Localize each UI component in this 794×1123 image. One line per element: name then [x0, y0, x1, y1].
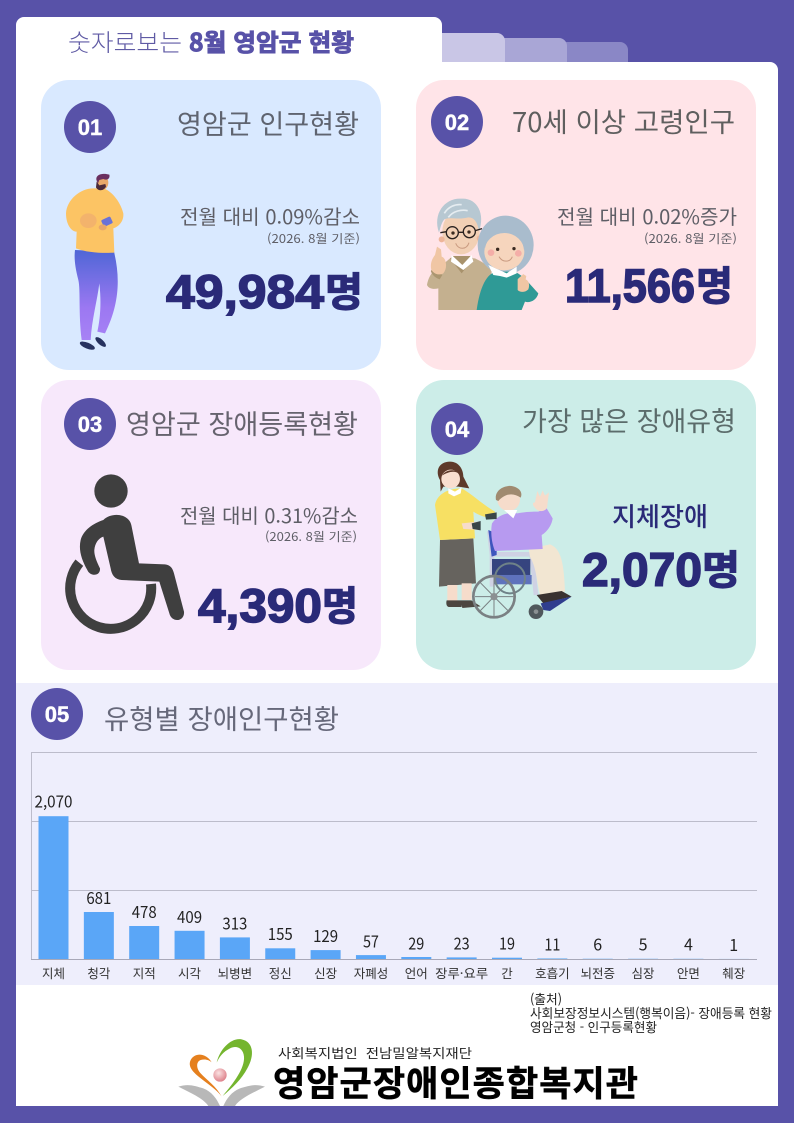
badge 01: 01 [78, 115, 102, 140]
date note: (2026. 8월 기준) [644, 230, 737, 247]
bar chart [31, 752, 757, 982]
figure: 49,984 [166, 265, 324, 318]
bar: 뇌전증 [580, 932, 615, 982]
bar: 간: 간 [501, 963, 513, 982]
folder tabs [436, 33, 628, 62]
bar: 뇌전증: 6 [593, 932, 602, 956]
organisation name: 사회복지법인 전남밀알복지재단 [278, 1043, 472, 1062]
panel: 05 by type [16, 683, 778, 985]
bar: 췌장: 췌장 [722, 963, 746, 982]
figure: 명 [322, 574, 358, 632]
bar: 뇌병변 [218, 910, 252, 982]
change text: 전월 대비 0.02%증가 [557, 201, 737, 230]
bar: 정신: 155 [268, 921, 293, 945]
title: 8월 영암군 현황 [189, 23, 354, 58]
bar: 청각: 청각 [87, 963, 111, 982]
figure: 명 [702, 538, 740, 596]
panel: 04 most common type [416, 380, 756, 670]
logo mark [178, 1039, 265, 1106]
source note: 영암군청 - 인구등록현황 [530, 1017, 657, 1036]
bar: 지적: 지적 [133, 963, 156, 982]
bar: 심장: 5 [639, 932, 648, 956]
badge 03: 03 [78, 412, 102, 437]
bar: 신장 [311, 923, 341, 982]
heading: elderly: 70세 이상 고령인구 [512, 101, 735, 140]
icon: caregiver and wheelchair user [435, 462, 572, 619]
bar: 자폐성: 자폐성 [354, 963, 388, 982]
bar: 췌장: 1 [729, 932, 738, 956]
figure: 명 [696, 254, 733, 312]
bar: 지체: 2,070 [34, 788, 73, 812]
bar: 지체: 지체 [42, 963, 65, 982]
heading: registered: 영암군 장애등록현황 [126, 403, 358, 442]
organisation name: 영암군장애인종합복지관 [273, 1056, 638, 1107]
bar: 뇌병변: 뇌병변 [218, 963, 252, 982]
bar: 간: 19 [499, 930, 515, 954]
bar: 장루·요루: 장루·요루 [435, 963, 488, 982]
icon: man with phone [66, 174, 123, 351]
bar: 언어 [401, 930, 431, 982]
bar: 간 [492, 930, 522, 982]
bar: 언어: 언어 [405, 963, 428, 982]
figure [582, 538, 740, 596]
bar: 자폐성: 57 [363, 928, 379, 952]
bar: 장루·요루 [435, 930, 488, 982]
source note [530, 989, 772, 1036]
badge 02 [431, 96, 483, 148]
bar: 안면: 안면 [677, 963, 700, 982]
bar: 시각 [175, 904, 205, 982]
badge 04: 04 [445, 417, 470, 442]
badge 05 [31, 688, 83, 740]
bar: 뇌병변: 313 [222, 910, 247, 934]
figure: 11,566 [565, 259, 695, 312]
badge 02: 02 [445, 110, 469, 135]
bar: 정신: 정신 [269, 963, 292, 982]
title: 숫자로보는 [68, 23, 182, 58]
bar: 호흡기: 호흡기 [535, 963, 570, 982]
change text: 전월 대비 0.31%감소 [180, 500, 358, 529]
panel: 01 population [41, 80, 381, 370]
bar: 언어: 29 [408, 930, 424, 954]
bar: 청각 [84, 885, 114, 982]
source note: 사회보장정보시스템(행복이음)- 장애등록 현황 [530, 1003, 772, 1022]
panel: 03 registered disabled [41, 380, 381, 670]
badge 05: 05 [45, 702, 69, 727]
badge 01 [64, 101, 116, 153]
change text: 전월 대비 0.09%감소 [180, 201, 360, 230]
bar: 췌장 [719, 932, 749, 982]
bar: 시각: 시각 [178, 963, 202, 982]
date note: (2026. 8월 기준) [265, 528, 357, 545]
bar: 지체 [34, 788, 73, 982]
icon: elderly couple [427, 199, 538, 310]
bar: 안면 [673, 932, 703, 982]
bar: 신장: 129 [313, 923, 338, 947]
title [68, 23, 354, 58]
figure: 2,070 [582, 543, 702, 596]
heading: most common: 가장 많은 장애유형 [522, 400, 736, 439]
panel: 02 elderly [416, 80, 756, 370]
bar: 정신 [265, 921, 295, 982]
bar: 자폐성 [354, 928, 388, 982]
figure [166, 260, 363, 318]
bar: 신장: 신장 [314, 963, 338, 982]
bar: 심장 [628, 932, 658, 982]
heading: by type: 유형별 장애인구현황 [104, 698, 339, 737]
figure: 명 [325, 260, 363, 318]
disability type: 지체장애 [612, 497, 708, 534]
date note: (2026. 8월 기준) [267, 230, 360, 247]
source note: (출처) [530, 989, 562, 1008]
bar: 안면: 4 [684, 932, 693, 956]
heading: population: 영암군 인구현황 [177, 103, 359, 142]
bar: 뇌전증: 뇌전증 [580, 963, 615, 982]
bar: 지적: 478 [132, 899, 157, 923]
bar: 시각: 409 [177, 904, 202, 928]
figure: 4,390 [198, 579, 322, 632]
badge 04 [431, 403, 483, 455]
badge 03 [64, 398, 116, 450]
figure [198, 574, 358, 632]
bar: 청각: 681 [86, 885, 111, 909]
bar: 장루·요루: 23 [454, 930, 470, 954]
bar: 심장: 심장 [632, 963, 655, 982]
bar: 호흡기 [535, 932, 570, 982]
icon: wheelchair [70, 474, 184, 629]
bar: 호흡기: 11 [544, 932, 560, 956]
bar: 지적 [129, 899, 159, 982]
